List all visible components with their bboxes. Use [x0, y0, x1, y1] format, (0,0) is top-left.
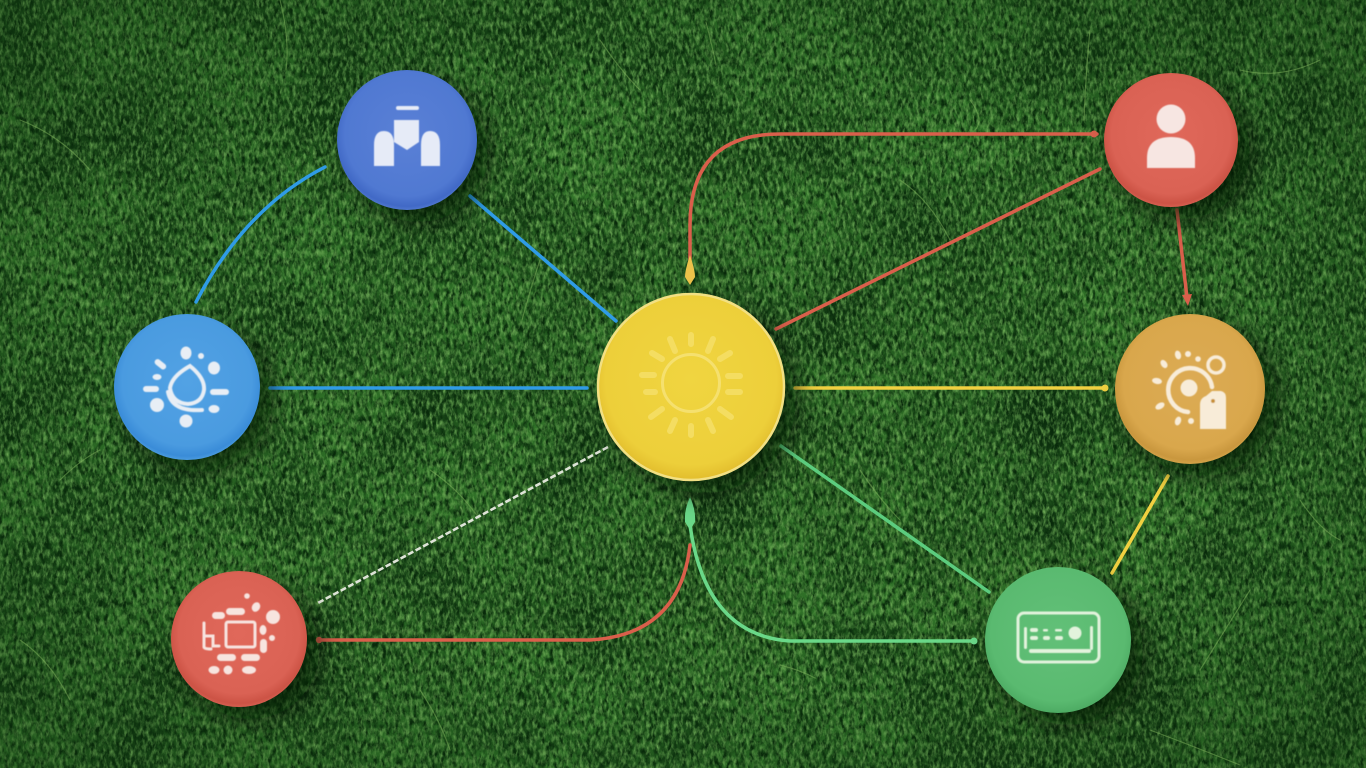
connector: dark blue node to light blue node (arc) [196, 167, 325, 302]
node: dark blue, buildings icon [337, 70, 477, 210]
icon: buildings with arrow [374, 106, 440, 166]
icon: device panel [1018, 613, 1099, 662]
arrow: green node to hub (curved) [685, 497, 978, 644]
icon: circuit chip [204, 593, 280, 674]
icon: sun [642, 335, 740, 435]
connector: light blue node to hub [270, 386, 587, 390]
arrow: person node to amber node [1177, 210, 1192, 306]
connector: dark blue node to hub [470, 196, 616, 321]
connector: red chip node to hub (curved) [316, 545, 690, 643]
arrow: hub to amber node [795, 384, 1108, 392]
node: green, device panel icon [985, 567, 1131, 713]
node: red, person icon [1104, 73, 1238, 207]
node: central yellow sun hub [598, 294, 784, 480]
node shadows [126, 82, 1277, 725]
icon: water drop with rays [143, 346, 229, 428]
node: amber, sun and tag icon [1115, 314, 1265, 464]
node: light blue, water drop icon [114, 314, 260, 460]
connector: dashed white link, chip node to hub [316, 447, 608, 604]
connector: hub to green node (straight) [781, 446, 989, 592]
connector: amber node to green node [1112, 476, 1168, 573]
icon: sun ring with price tag [1152, 350, 1226, 429]
connector: person node to hub (straight red) [776, 169, 1100, 329]
connector: person node to hub (curved red arrow) [685, 130, 1098, 285]
node: red, circuit chip icon [171, 571, 307, 707]
icon: person [1147, 104, 1195, 168]
